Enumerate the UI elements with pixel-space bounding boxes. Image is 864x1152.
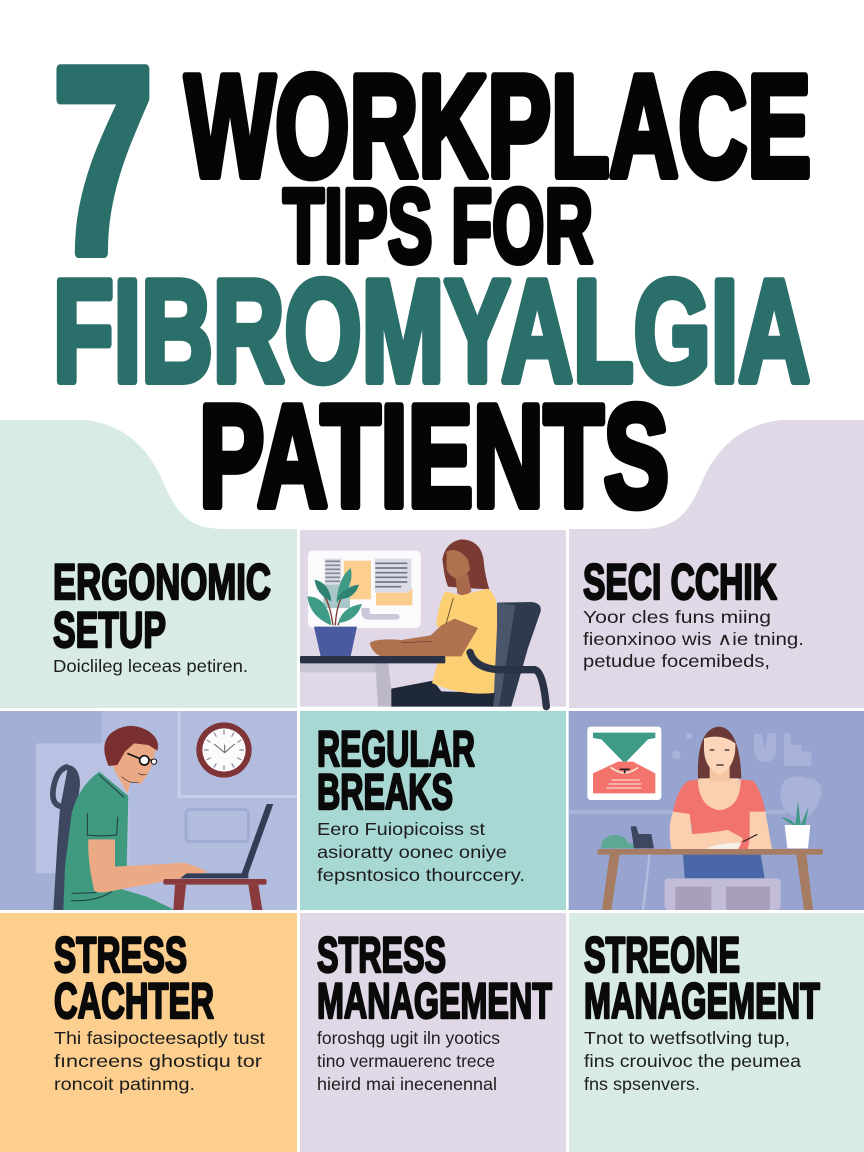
body text line 1: foroshqg ugit iln yootics [317, 1028, 500, 1048]
heading: STREONE [584, 927, 740, 983]
chair armrest [470, 652, 546, 707]
title line: TIPS FOR: TIPS FOR [283, 168, 593, 285]
woman [670, 727, 772, 878]
desk top [300, 656, 445, 663]
heading: STRESS [317, 927, 446, 983]
body text line 3: roncoit patinmg. [54, 1074, 195, 1094]
body text line 2: asioratty oonec oniye [317, 842, 507, 862]
icon: potted plant [307, 568, 362, 656]
body text line 2: fins crouivoc the peumea [584, 1051, 801, 1071]
body text line 2: fıncreens ghostiqu tor [54, 1051, 262, 1071]
body text line 2: fieonxinoo wis ∧ie tning. [583, 629, 804, 649]
body text line 2: tino vermauerenc trece [317, 1051, 495, 1071]
monitor [308, 551, 421, 628]
panel background [300, 711, 566, 910]
body text line 1: Thi fasipocteesaρtly tust [54, 1028, 265, 1048]
chair [491, 602, 541, 707]
heading line 2: MANAGEMENT [317, 973, 552, 1029]
panel background [300, 913, 566, 1152]
panel: illustration woman writing [569, 711, 864, 910]
heading line 2: SETUP [53, 602, 166, 658]
panel: illustration man at laptop [0, 711, 297, 910]
wall shapes [0, 711, 297, 910]
man [63, 726, 207, 910]
body text line 3: hieird mai inecenennal [317, 1074, 497, 1094]
numeral 7: 7 [52, 11, 154, 310]
panel background [0, 711, 297, 910]
title [52, 11, 811, 537]
curved mint header shape [0, 420, 297, 708]
wall decor [569, 733, 821, 822]
heading: ERGONOMIC [53, 554, 271, 610]
desk items [601, 826, 654, 848]
desk [300, 663, 394, 707]
heading: STRESS [54, 927, 187, 983]
icon: wall clock [196, 722, 252, 778]
panel: secondary tip text [583, 554, 804, 671]
chair [53, 765, 80, 910]
body text line 1: Yoor cles funs miing [583, 607, 771, 627]
heading: SECI CCHIK [583, 554, 777, 610]
panel: illustration woman at desk [300, 530, 566, 707]
heading: REGULAR [317, 721, 475, 777]
panel: ergonomic setup text [53, 554, 271, 676]
panel: regular breaks text [300, 711, 566, 910]
table [163, 879, 267, 910]
panel background [569, 913, 864, 1152]
panel background [569, 711, 864, 910]
body text line 3: fns spsenvers. [584, 1074, 700, 1094]
desk [597, 849, 823, 910]
heading line 2: CACHTER [54, 973, 214, 1029]
body text: Doiclileg leceas petiren. [53, 656, 248, 676]
body text line 1: Tnot to wetfsotlving tup, [584, 1028, 790, 1048]
body text line 1: Eero Fuiopicoiss st [317, 819, 485, 839]
laptop [180, 804, 273, 878]
body text line 3: petudue focemibeds, [583, 651, 770, 671]
curved lavender header shape [569, 420, 864, 708]
body text line 3: fepsntosico thourccery. [317, 865, 525, 885]
icon: potted plant [781, 801, 810, 848]
panel background [300, 530, 566, 707]
poster [587, 727, 661, 800]
woman [370, 539, 497, 707]
panel: stress management [300, 913, 566, 1152]
heading line 2: BREAKS [317, 764, 453, 820]
panel: streone management [569, 913, 864, 1152]
chair [665, 878, 781, 910]
panel background [0, 913, 297, 1152]
panel: stress catcher [0, 913, 297, 1152]
